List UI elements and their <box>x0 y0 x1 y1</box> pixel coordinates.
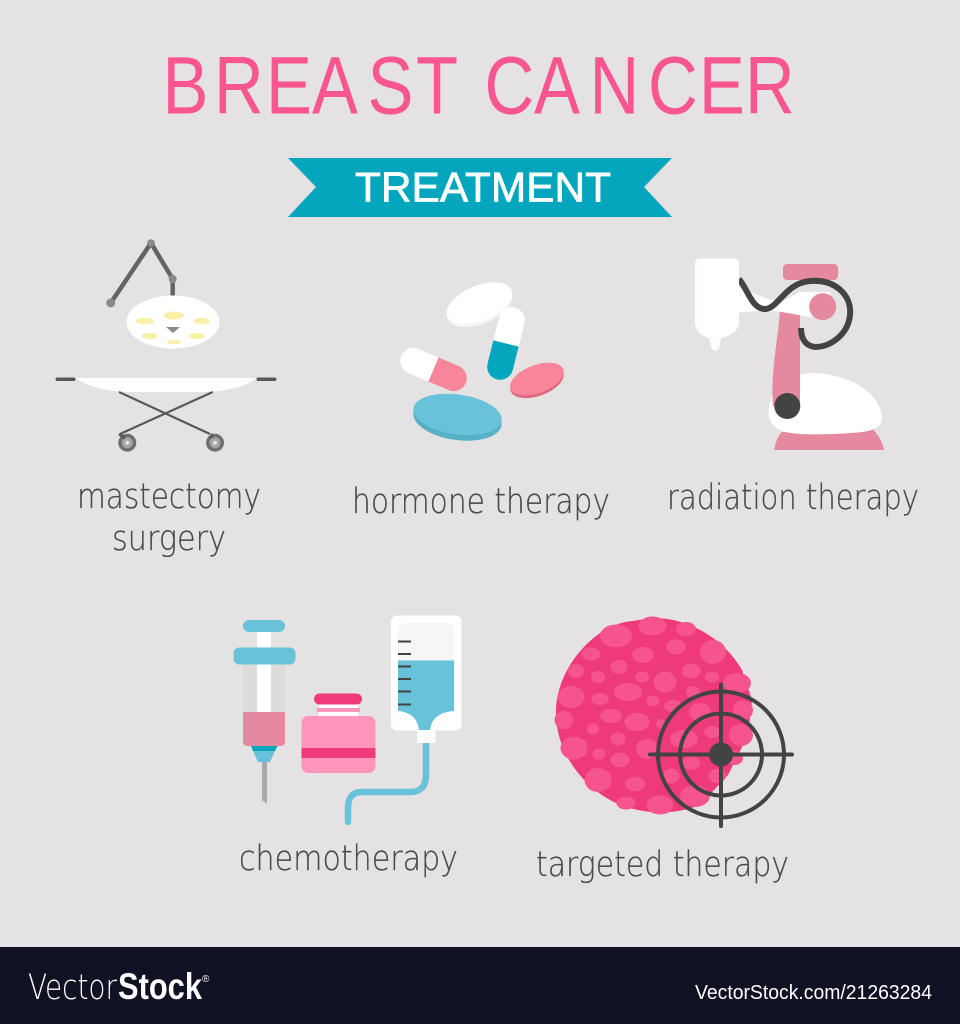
VectorStock logo <box>28 966 202 1008</box>
stretcher legs and wheels <box>118 392 224 452</box>
label: mastectomy surgery <box>77 477 261 559</box>
machine body <box>769 373 882 434</box>
icon: surgery lamp and table <box>56 240 276 452</box>
tube <box>348 740 426 822</box>
base foot <box>774 429 884 450</box>
registered mark: ® <box>202 974 210 985</box>
scale marks <box>398 642 411 704</box>
icon: radiation machine <box>695 258 884 450</box>
title: BREAST CANCER <box>163 40 795 132</box>
label: targeted therapy: targeted therapy <box>536 845 789 885</box>
icon: pills <box>396 274 568 446</box>
pink tablet <box>506 356 568 405</box>
pivot circle <box>809 293 836 320</box>
operating lamp <box>126 296 220 348</box>
cable <box>739 279 850 347</box>
lamp arm <box>106 240 177 308</box>
label: mastectomy surgery: surgery <box>112 519 226 559</box>
white tablet <box>441 274 518 336</box>
connector <box>417 730 436 743</box>
bag <box>391 616 462 730</box>
ribbon banner: treatment <box>288 158 672 217</box>
tumor <box>554 616 753 814</box>
label: mastectomy surgery: mastectomy <box>77 477 261 517</box>
VectorStock logo: Stock <box>118 966 202 1007</box>
ribbon banner: treatment: TREATMENT <box>355 164 611 210</box>
fluid <box>398 660 454 731</box>
blue tablet <box>411 389 504 446</box>
icon: vial <box>302 694 376 773</box>
label: hormone therapy: hormone therapy <box>352 482 610 522</box>
top bar <box>783 264 838 280</box>
stretcher top <box>56 378 276 392</box>
emitter arm <box>735 286 830 318</box>
footer url: VectorStock.com/21263284 <box>695 982 932 1004</box>
label: chemotherapy: chemotherapy <box>239 839 458 879</box>
teal capsule <box>484 304 528 383</box>
emitter head <box>695 258 739 351</box>
footer bar <box>0 947 960 1024</box>
pink capsule <box>396 344 471 395</box>
icon: syringe <box>234 620 296 804</box>
VectorStock logo: Vector <box>28 968 117 1008</box>
vertical arm <box>772 311 800 406</box>
icon: IV drip bag <box>348 616 462 822</box>
crosshair target <box>650 684 792 826</box>
pivot black <box>774 393 800 419</box>
icon: tumor cell with target <box>554 616 792 826</box>
